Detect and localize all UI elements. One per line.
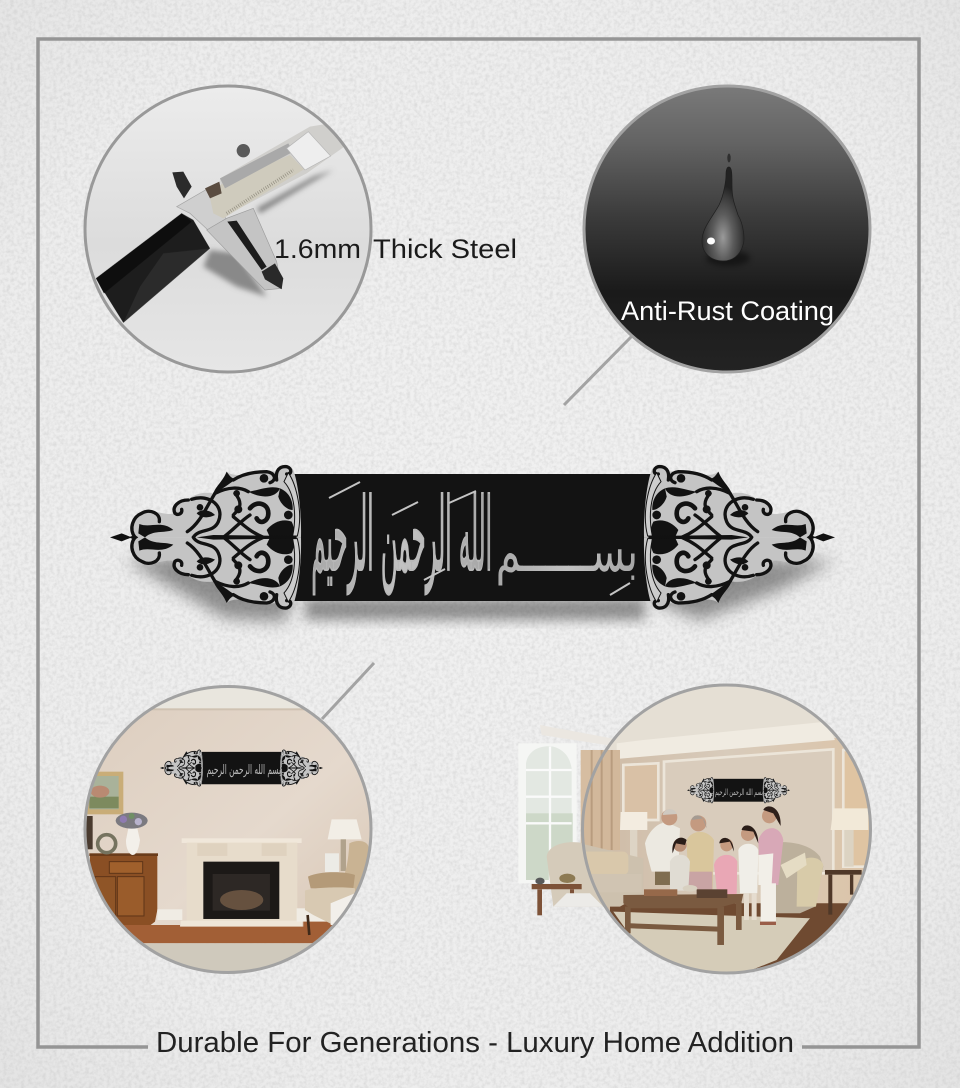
lamp [325, 819, 362, 872]
dark small frame [86, 816, 93, 849]
panel: caliper on steel [84, 86, 372, 374]
rug [613, 912, 810, 973]
crown moulding [617, 722, 835, 759]
family: grandmother [687, 815, 714, 890]
side table [825, 870, 862, 915]
wreath [98, 835, 116, 853]
left sofa [585, 844, 637, 907]
family: girl in white [738, 825, 758, 920]
wall moulding panels [623, 748, 873, 873]
rug [144, 943, 312, 971]
footer caption: Durable For Generations - Luxury Home Addition [156, 1027, 794, 1059]
product shadow [125, 555, 835, 622]
faded window and furniture outside circle [518, 725, 638, 915]
vase and flowers [116, 813, 148, 855]
plate and ornaments [110, 466, 835, 609]
leader line: coating to product [564, 336, 632, 405]
calligraphy: allah ar-rahman ar-rahim: الله الرحمن الرحيم [311, 478, 492, 595]
wall art in room: بسم الله الرحمن الرحيم [715, 788, 763, 797]
family: girl in pink [714, 838, 737, 895]
lamps [620, 808, 868, 867]
product: calligraphy wall art [110, 466, 835, 622]
soft shadows [203, 170, 333, 297]
armchair [305, 841, 373, 935]
icon: steel caliper [172, 122, 347, 290]
leader line: product to room [322, 663, 374, 719]
label: anti-rust coating: Anti-Rust Coating [621, 296, 834, 326]
wall [87, 710, 370, 927]
calligraphy: bism: بســــــم [496, 516, 638, 586]
wall art in room [687, 777, 790, 803]
cabinet [89, 853, 158, 931]
family: mother [758, 806, 783, 925]
panel: anti-rust coating [584, 86, 870, 372]
fireplace [181, 838, 302, 927]
right sofa [776, 842, 824, 914]
wall art in room: بسم الله الرحمن الرحيم [207, 762, 281, 778]
family: granddaughter in white [670, 838, 690, 891]
calligraphy: diacritic strokes [329, 482, 630, 595]
icon: black steel tube [96, 213, 210, 323]
panel: living room with fireplace [83, 685, 373, 973]
label: steel thickness: 1.6mm [274, 234, 361, 264]
wall [607, 738, 864, 911]
panel: family in living room [518, 683, 873, 980]
baseboard [157, 909, 182, 920]
family: grandfather [645, 809, 680, 885]
wall art in room [160, 750, 323, 786]
ceiling [155, 688, 301, 708]
floor [124, 922, 332, 944]
curtain [580, 750, 620, 850]
ceiling [608, 686, 836, 750]
icon: water drop [702, 154, 750, 266]
painting [87, 772, 123, 814]
coffee table [623, 885, 743, 945]
label: steel thickness: Thick Steel [373, 234, 517, 264]
floor [610, 903, 848, 969]
